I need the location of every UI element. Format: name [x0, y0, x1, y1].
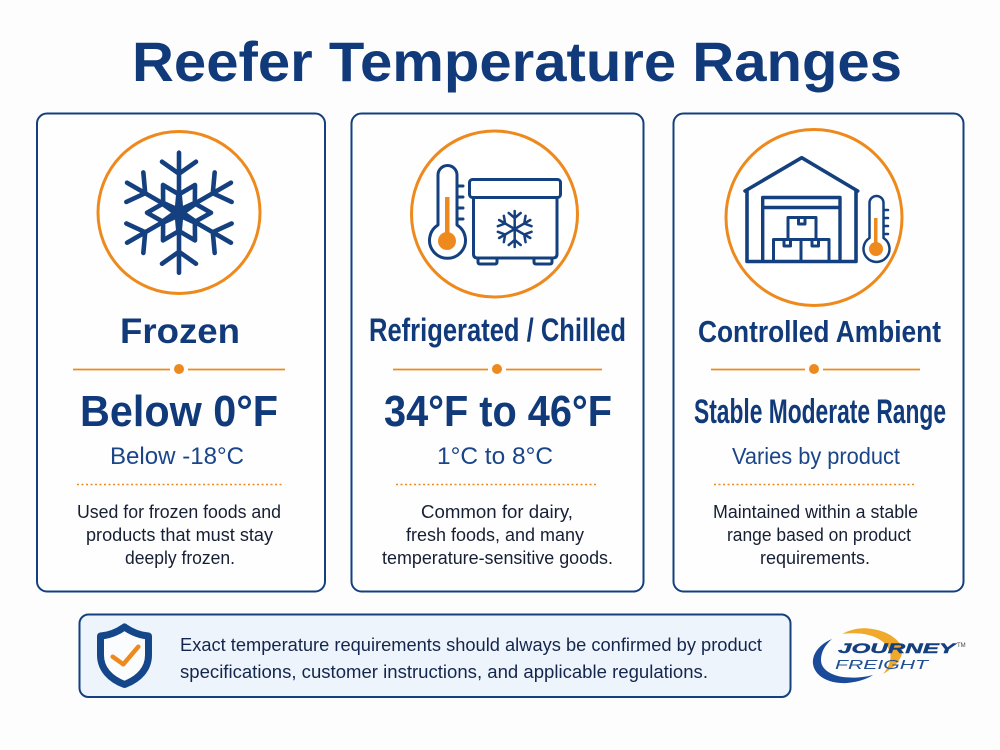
icon: shield with check: [100, 627, 148, 684]
note text: Exact temperature requirements should always be confirmed by product: [180, 635, 762, 655]
note text: [180, 635, 762, 682]
description: Maintained within a stable: [713, 502, 918, 522]
divider with dot: [711, 364, 920, 374]
icon: warehouse and thermometer: [726, 130, 902, 306]
description: [382, 502, 613, 568]
icon: thermometer and cold box: [412, 131, 578, 297]
description: fresh foods, and many: [406, 525, 584, 545]
heading: frozen: Frozen: [120, 312, 240, 351]
description: deeply frozen.: [125, 548, 235, 568]
description: [77, 502, 281, 568]
heading: refrigerated: Refrigerated / Chilled: [369, 312, 626, 348]
logo: Journey Freight: [813, 628, 966, 683]
logo: Journey Freight: JOURNEY: [838, 640, 958, 656]
temperature fahrenheit: Below 0°F: [80, 387, 278, 436]
panel: controlled ambient: [674, 114, 964, 592]
divider with dot: [73, 364, 285, 374]
description: products that must stay: [86, 525, 273, 545]
description: Common for dairy,: [421, 502, 573, 522]
logo: Journey Freight: FREIGHT: [835, 657, 930, 672]
description: Used for frozen foods and: [77, 502, 281, 522]
description: range based on product: [727, 525, 911, 545]
temperature celsius: 1°C to 8°C: [437, 443, 553, 470]
description: requirements.: [760, 548, 870, 568]
description: [713, 502, 918, 568]
temperature celsius: Below -18°C: [110, 443, 244, 470]
callout: confirmation note: [80, 614, 790, 697]
description: temperature-sensitive goods.: [382, 548, 613, 568]
divider with dot: [393, 364, 602, 374]
dotted divider: [714, 484, 915, 486]
temperature fahrenheit: 34°F to 46°F: [384, 387, 612, 436]
icon: snowflake in orange circle: [98, 132, 260, 294]
panel: frozen: [37, 114, 325, 592]
note text: specifications, customer instructions, and applicable regulations.: [180, 662, 708, 682]
logo: Journey Freight: TM: [957, 643, 966, 649]
dotted divider: [396, 484, 598, 486]
heading: controlled ambient: Controlled Ambient: [698, 314, 941, 349]
dotted divider: [77, 484, 282, 486]
title: Reefer Temperature Ranges: [132, 30, 902, 93]
range note: Varies by product: [732, 443, 901, 469]
panel: refrigerated: [352, 114, 644, 592]
